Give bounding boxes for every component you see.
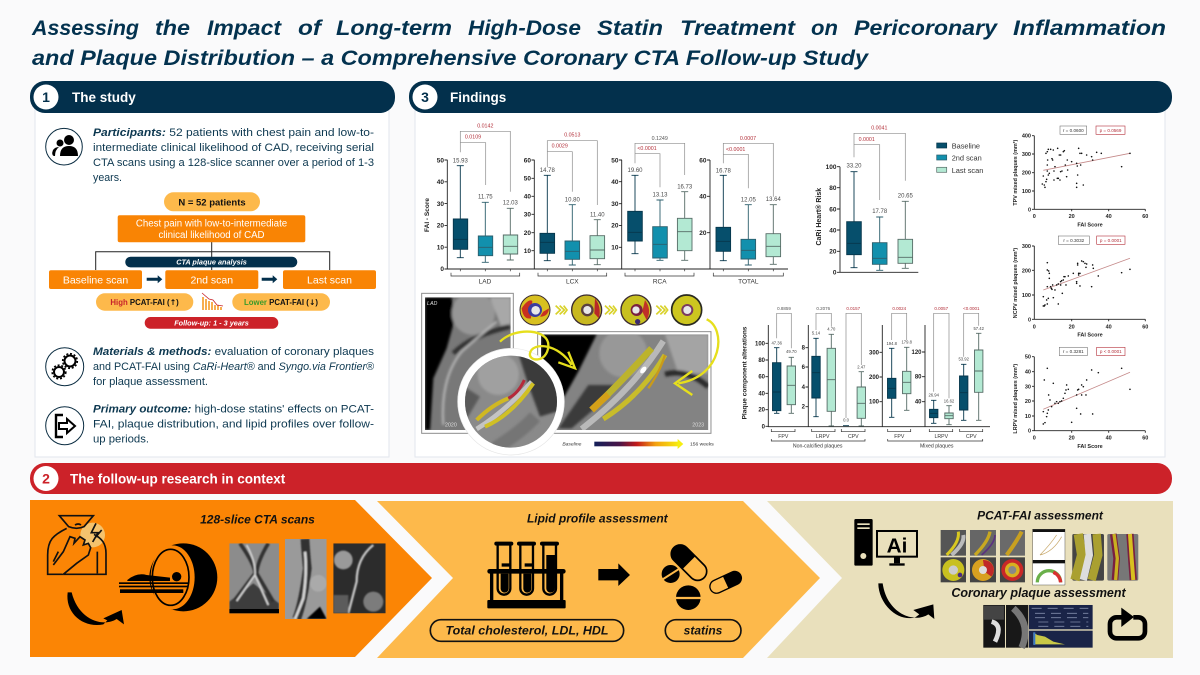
legend: Baseline — [952, 142, 980, 150]
icon: AI computer: Ai — [887, 534, 907, 557]
chart group: RCA: 20 — [611, 223, 619, 230]
chart group: LCX: LCX — [566, 278, 579, 285]
box: baseline scan — [49, 270, 142, 289]
panel: lipid profile — [377, 501, 820, 658]
brackets and p values: <0.0001 — [963, 306, 980, 311]
group labels — [771, 429, 983, 450]
pill: follow-up — [145, 317, 278, 329]
images: coronary CT — [229, 539, 386, 619]
text: participants: CTA scans using a 128-slice scanner over a period of 1-3 — [93, 157, 374, 169]
brackets and p values: 0.0057 — [934, 306, 949, 311]
chart group: LCX: 14.78 — [540, 168, 555, 174]
scatter plot: TPV: 0 — [1028, 207, 1031, 213]
box: last scan — [283, 270, 376, 289]
legend — [937, 142, 983, 175]
pill: CTA plaque analysis — [125, 257, 297, 267]
scatter plot: TPV: 20 — [1069, 214, 1075, 220]
chart group: LAD: 20 — [437, 223, 444, 230]
scatter plot: TPV: FAI Score — [1077, 223, 1103, 229]
scatter plot: NCPV: 200 — [1022, 268, 1031, 274]
chart group: LAD: 0 — [440, 266, 444, 273]
chart group: LAD: 12.03 — [503, 201, 518, 207]
pill: high PCAT-FAI — [96, 293, 193, 311]
group labels: LRPV — [816, 434, 830, 440]
pill: lower PCAT-FAI: Lower PCAT-FAI (↓) — [244, 298, 318, 307]
icon: chest pain — [48, 516, 106, 574]
scatter plot: NCPV: 300 — [1022, 244, 1031, 250]
icons: yellow chevrons — [556, 306, 668, 314]
text: primary outcome: up periods. — [93, 434, 149, 446]
title: Inflammation — [1013, 16, 1166, 40]
pill: statins outline — [665, 620, 741, 641]
chart: plaque component alterations: 100 — [869, 400, 880, 406]
pill: CTA plaque analysis: CTA plaque analysis — [176, 258, 247, 267]
scatter plot: LRPV: p < 0.0001 — [1100, 349, 1122, 354]
scatter plot: TPV: r = 0.0600 — [1063, 128, 1084, 133]
scatter plot: NCPV: NCPV mixed plaques (mm³) — [1013, 248, 1019, 318]
scatter plot: NCPV: 0 — [1033, 324, 1036, 330]
scatter plot: NCPV: 40 — [1106, 324, 1112, 330]
arrow: yellow curve from cross sections — [675, 319, 718, 395]
boxes: non-calcified plaques: 4.70 — [827, 326, 836, 331]
icon: declining bars — [202, 293, 223, 310]
chart group: LCX: 10 — [524, 248, 531, 255]
heading: the study: 1 — [42, 89, 50, 105]
chart group: LCX: 20 — [524, 230, 531, 237]
chart: plaque component alterations: 60 — [758, 375, 766, 381]
chart group: RCA: 10 — [611, 245, 619, 252]
group labels: FPV — [894, 434, 905, 440]
icon: test tubes — [487, 542, 566, 608]
scatter plot: LRPV: 20 — [1025, 399, 1031, 405]
chart group: LCX: 11.40 — [590, 212, 605, 218]
boxes: non-calcified plaques: 47.36 — [771, 340, 783, 345]
chart group: TOTAL: 20 — [699, 230, 707, 237]
brackets and p values: 0.8859 — [777, 306, 791, 311]
chart: CaRi Heart risk box plot: 0.0001 — [859, 137, 875, 143]
panel: CTA scans: 128-slice CTA scans — [200, 512, 315, 526]
chart group: RCA: 16.73 — [677, 184, 693, 190]
text: materials and methods: and PCAT-FAI using CaRi-Heart® and Syngo.via Frontier® — [93, 361, 375, 373]
heading: follow-up research in context: The follow-up research in context — [70, 472, 286, 486]
image: magnified circle — [458, 348, 564, 455]
text: participants — [93, 127, 374, 184]
panel: PCAT-FAI and plaque assessment — [767, 501, 1173, 658]
pill: lower PCAT-FAI — [232, 293, 330, 311]
panel: the study — [30, 81, 395, 457]
boxes: non-calcified plaques: 2.47 — [857, 364, 866, 369]
chart group: TOTAL: 13.64 — [766, 197, 781, 203]
heading: findings — [409, 81, 1172, 113]
scatter plot: LRPV: 50 — [1025, 355, 1031, 361]
boxes: non-calcified plaques — [771, 326, 866, 426]
chart: plaque component alterations: 0 — [762, 424, 766, 430]
image: 2023 CT: 2023 — [692, 423, 704, 429]
scatter plot: LRPV: 40 — [1025, 370, 1031, 376]
boxes: non-calcified plaques: 0.0 — [843, 418, 850, 423]
chart: CaRi Heart risk box plot: CaRi Heart® Risk — [815, 188, 823, 246]
icon: gears — [46, 348, 84, 386]
chart: plaque component alterations: 80 — [758, 358, 766, 364]
scatter plot: LRPV: r = 0.3281 — [1063, 349, 1084, 354]
box: baseline scan: Baseline scan — [63, 274, 128, 286]
chart group: TOTAL: 60 — [699, 157, 707, 164]
chart: plaque component alterations: 4 — [802, 385, 806, 391]
text: participants: Participants: 52 patients with chest pain and low-to- — [93, 127, 374, 139]
group labels: LRPV — [935, 434, 949, 440]
chart group: LAD: LAD — [479, 278, 492, 285]
chart: CaRi Heart risk box plot — [815, 125, 918, 277]
title: and Plaque Distribution – a Comprehensive Coronary CTA Follow-up Study — [32, 46, 869, 70]
label: lipid measures: Total cholesterol, LDL, HDL — [446, 624, 608, 638]
title: Pericoronary — [854, 16, 998, 40]
chart: CaRi Heart risk box plot: 0.0041 — [871, 125, 887, 131]
chart: plaque component alterations: 120 — [911, 350, 922, 356]
chart group: TOTAL: 16.78 — [716, 168, 731, 174]
scatter plot: LRPV: 10 — [1025, 414, 1031, 420]
chart group: RCA: 30 — [611, 201, 619, 208]
scatter plot: LRPV: 0 — [1028, 429, 1031, 435]
chart group: LAD: 40 — [437, 179, 444, 186]
heading: follow-up research in context: 2 — [42, 470, 50, 486]
panel: findings — [409, 81, 1172, 457]
pill: N = 52 patients: N = 52 patients — [178, 198, 246, 208]
chart group: LAD: 30 — [437, 201, 444, 208]
chart: plaque component alterations: 40 — [915, 400, 922, 406]
chart group: LCX: 0.0029 — [552, 144, 568, 150]
chart: CaRi Heart risk box plot: 40 — [829, 227, 837, 234]
text: participants: intermediate clinical likelihood of CAD, receiving serial — [93, 142, 374, 154]
box: chest pain: Chest pain with low-to-intermediate — [136, 219, 287, 230]
chart group: LAD: 0.0142 — [477, 123, 493, 129]
group labels: Mixed plaques — [920, 444, 954, 450]
chart group: LCX: 30 — [524, 212, 531, 219]
scatter plot: LRPV — [1013, 347, 1148, 450]
box: 2nd scan: 2nd scan — [190, 274, 233, 286]
chart group: LAD: 50 — [437, 157, 444, 164]
chart group: RCA: 50 — [611, 157, 619, 164]
chart group: LCX — [524, 133, 607, 285]
figure: CT images with PCAT overlay — [422, 292, 718, 455]
scatter plot: LRPV: FAI Score — [1077, 444, 1103, 450]
chart: plaque component alterations: 80 — [915, 375, 922, 381]
group labels: Non-calcified plaques — [793, 444, 843, 450]
icon: pills — [662, 541, 744, 610]
scatter plot: NCPV — [1013, 236, 1148, 339]
chart: CaRi Heart risk box plot: 17.78 — [872, 209, 888, 215]
scatter plot: TPV: 100 — [1022, 189, 1031, 195]
scatter plot: TPV: 200 — [1022, 171, 1031, 177]
title: Assessing — [31, 16, 139, 40]
chart: plaque component alterations: 8 — [802, 346, 806, 352]
arrow: 2nd to last — [262, 275, 277, 283]
text: participants: years. — [93, 172, 122, 184]
title: Treatment — [680, 16, 796, 40]
legend: 2nd scan — [952, 154, 982, 163]
brackets and p values: 0.2076 — [816, 306, 831, 311]
boxes: non-calcified plaques: 49.70 — [786, 349, 797, 354]
group labels: CPV — [966, 434, 977, 440]
brackets and p values — [777, 306, 980, 418]
chart: CaRi Heart risk box plot: 33.20 — [846, 164, 862, 170]
text: materials and methods — [93, 346, 375, 388]
chart group: RCA — [611, 136, 694, 285]
color bar: Baseline — [562, 442, 582, 448]
images: PCAT-FAI thumbnails — [941, 529, 1138, 585]
title: Long-term — [336, 16, 452, 40]
flowchart — [49, 192, 376, 329]
heading: the study: The study — [72, 90, 136, 105]
chart: plaque component alterations: 40 — [758, 391, 766, 397]
boxes: mixed plaques — [886, 326, 985, 425]
scatter plot: NCPV: 20 — [1069, 324, 1075, 330]
chart group: LAD — [437, 123, 520, 285]
boxes: mixed plaques: 57.42 — [973, 326, 985, 331]
pill: N = 52 patients — [164, 192, 260, 211]
scatter plot: TPV: 300 — [1022, 152, 1031, 158]
chart: CaRi Heart risk box plot: 100 — [826, 164, 837, 171]
chart: CaRi Heart risk box plot: 0 — [833, 270, 837, 277]
scatter plot: TPV — [1013, 126, 1148, 229]
chart group: LCX: 40 — [524, 194, 531, 201]
chart: CaRi Heart risk box plot: 60 — [829, 206, 837, 213]
chart group: LAD: 15.93 — [453, 158, 468, 164]
chart group: TOTAL — [699, 136, 783, 285]
chart: plaque component alterations: 100 — [755, 341, 766, 347]
pill: high PCAT-FAI: High PCAT-FAI (↑) — [110, 298, 179, 307]
arrow: chest pain to scanner — [67, 592, 124, 625]
heading: findings: Findings — [450, 90, 506, 105]
chart group: RCA: 13.13 — [652, 193, 668, 199]
box: chest pain — [118, 215, 305, 242]
panel: lipid profile: Lipid profile assessment — [527, 512, 669, 526]
images: plaque software screens — [983, 605, 1093, 648]
chart: plaque component alterations: 300 — [869, 350, 880, 356]
pill: lipid labels — [430, 620, 624, 641]
image: 2020 CT: LAD — [427, 301, 438, 307]
heading: coronary plaque assessment: Coronary plaque assessment — [951, 586, 1127, 600]
icon: participants — [46, 128, 82, 165]
title: of — [298, 16, 323, 40]
chart: FAI score box plots — [424, 123, 788, 285]
scatter plot: TPV: TPV mixed plaques (mm³) — [1013, 140, 1019, 206]
chart group: TOTAL: TOTAL — [738, 278, 759, 285]
chart: CaRi Heart risk box plot: 80 — [829, 185, 837, 192]
chart group: LAD: 0.0109 — [465, 134, 481, 140]
text: primary outcome — [93, 404, 374, 446]
chart: CaRi Heart risk box plot: 20 — [829, 249, 837, 256]
scatter plot: NCPV: 100 — [1022, 293, 1031, 299]
scatter plot: TPV: p = 0.0569 — [1100, 128, 1122, 133]
title: Impact — [207, 16, 282, 40]
chart group: RCA: 40 — [611, 179, 619, 186]
image: 2020 CT — [422, 292, 513, 433]
color bar — [562, 439, 714, 449]
chart group: TOTAL: 40 — [699, 194, 707, 201]
title — [31, 16, 1166, 70]
text: primary outcome: FAI, plaque distribution, and lipid profiles over follow- — [93, 419, 374, 431]
arrow: baseline to 2nd — [147, 275, 162, 283]
scatter plot: LRPV: 20 — [1069, 435, 1075, 441]
chart group: LCX: 0.0513 — [564, 133, 580, 139]
boxes: mixed plaques: 53.92 — [958, 357, 970, 362]
chart: CaRi Heart risk box plot: 20.65 — [898, 193, 913, 199]
title: High-Dose — [468, 16, 581, 40]
box: last scan: Last scan — [307, 274, 352, 286]
title: the — [155, 16, 190, 40]
chart group: RCA: RCA — [653, 278, 667, 285]
chart: plaque component alterations: Plaque component alterations — [742, 326, 748, 419]
chart group: RCA: <0.0001 — [637, 146, 657, 152]
chart group: LCX: 50 — [524, 176, 531, 183]
chart: plaque component alterations: 20 — [758, 408, 766, 414]
title: Statin — [597, 16, 663, 40]
title: on — [811, 16, 838, 40]
heading: PCAT-FAI assessment: PCAT-FAI assessment — [977, 508, 1104, 522]
chart: plaque component alterations: 200 — [869, 375, 880, 381]
heading: findings: 3 — [421, 89, 429, 105]
chart group: LCX: 10.80 — [565, 198, 580, 204]
chart: plaque component alterations: 6 — [802, 365, 806, 371]
scatter plot: LRPV: LRPV mixed plaques (mm³) — [1013, 364, 1019, 434]
legend: Last scan — [952, 166, 983, 175]
axis label: FAI - Score: FAI - Score — [424, 198, 431, 232]
chart group: LCX: 60 — [524, 157, 531, 164]
boxes: non-calcified plaques: 5.14 — [812, 330, 821, 335]
arrow: lipid to statins — [598, 563, 630, 586]
chart group: LAD: 10 — [437, 244, 444, 251]
boxes: mixed plaques: 26.94 — [928, 393, 940, 398]
boxes: mixed plaques: 179.8 — [901, 340, 913, 345]
icon: AI computer — [854, 519, 917, 566]
heading: follow-up research in context — [30, 463, 1172, 494]
scatter plot: TPV: 60 — [1142, 214, 1148, 220]
chart group: TOTAL: 12.05 — [741, 198, 756, 204]
chart group: TOTAL: <0.0001 — [726, 147, 745, 153]
pill: follow-up: Follow-up: 1 - 3 years — [174, 318, 249, 328]
brackets and p values: 0.0024 — [892, 306, 907, 311]
scatter plot: NCPV: 0 — [1028, 317, 1031, 323]
scatter plot: LRPV: 60 — [1142, 435, 1148, 441]
scatter plot: NCPV: 60 — [1142, 324, 1148, 330]
text: primary outcome: Primary outcome: high-dose statins' effects on PCAT- — [93, 404, 374, 416]
chart group: LAD: 11.75 — [478, 195, 493, 201]
brackets and p values: 0.0157 — [846, 306, 861, 311]
group labels: CPV — [848, 434, 859, 440]
scatter plot: LRPV: 0 — [1033, 435, 1036, 441]
boxes: mixed plaques: 194.8 — [886, 341, 898, 346]
scatter plot: TPV: 400 — [1022, 134, 1031, 140]
image: 2020 CT: 2020 — [445, 423, 457, 429]
text: materials and methods: Materials & methods: evaluation of coronary plaques — [93, 346, 374, 358]
scatter plot: LRPV: 40 — [1106, 435, 1112, 441]
icon: outcome exit — [46, 407, 84, 445]
chart group: RCA: 0.1249 — [652, 136, 668, 142]
icon: repeat cycle — [1110, 617, 1145, 638]
chart group: RCA: 19.60 — [627, 168, 643, 174]
arrow: yellow curve to 2023 — [500, 332, 575, 368]
icons: cross sections — [520, 295, 702, 325]
chart: plaque component alterations: 2 — [802, 405, 806, 411]
text: materials and methods: for plaque assessment. — [93, 376, 208, 388]
icon: CT scanner — [119, 543, 217, 611]
image: 2023 CT — [538, 329, 711, 433]
arrow: AI to assessment — [878, 583, 934, 619]
panel: CTA scans — [30, 500, 432, 657]
scatter plot: TPV: 40 — [1106, 214, 1112, 220]
group labels: FPV — [778, 434, 789, 440]
chart group: TOTAL: 0.0007 — [740, 136, 756, 142]
scatter plot: TPV: 0 — [1033, 214, 1036, 220]
boxes: mixed plaques: 16.62 — [944, 398, 955, 403]
box: 2nd scan — [165, 270, 258, 289]
chart: plaque component alterations — [742, 306, 990, 450]
scatter plot: NCPV: FAI Score — [1077, 333, 1103, 339]
scatter plot: LRPV: 30 — [1025, 384, 1031, 390]
heading: the study — [30, 81, 395, 113]
scatter plot: NCPV: p = 0.0001 — [1100, 238, 1122, 243]
scatter plot: NCPV: r = 0.3032 — [1063, 238, 1085, 243]
color bar: 156 weeks — [690, 442, 714, 448]
box: chest pain: clinical likelihood of CAD — [158, 230, 265, 241]
label: statins: statins — [684, 624, 723, 638]
